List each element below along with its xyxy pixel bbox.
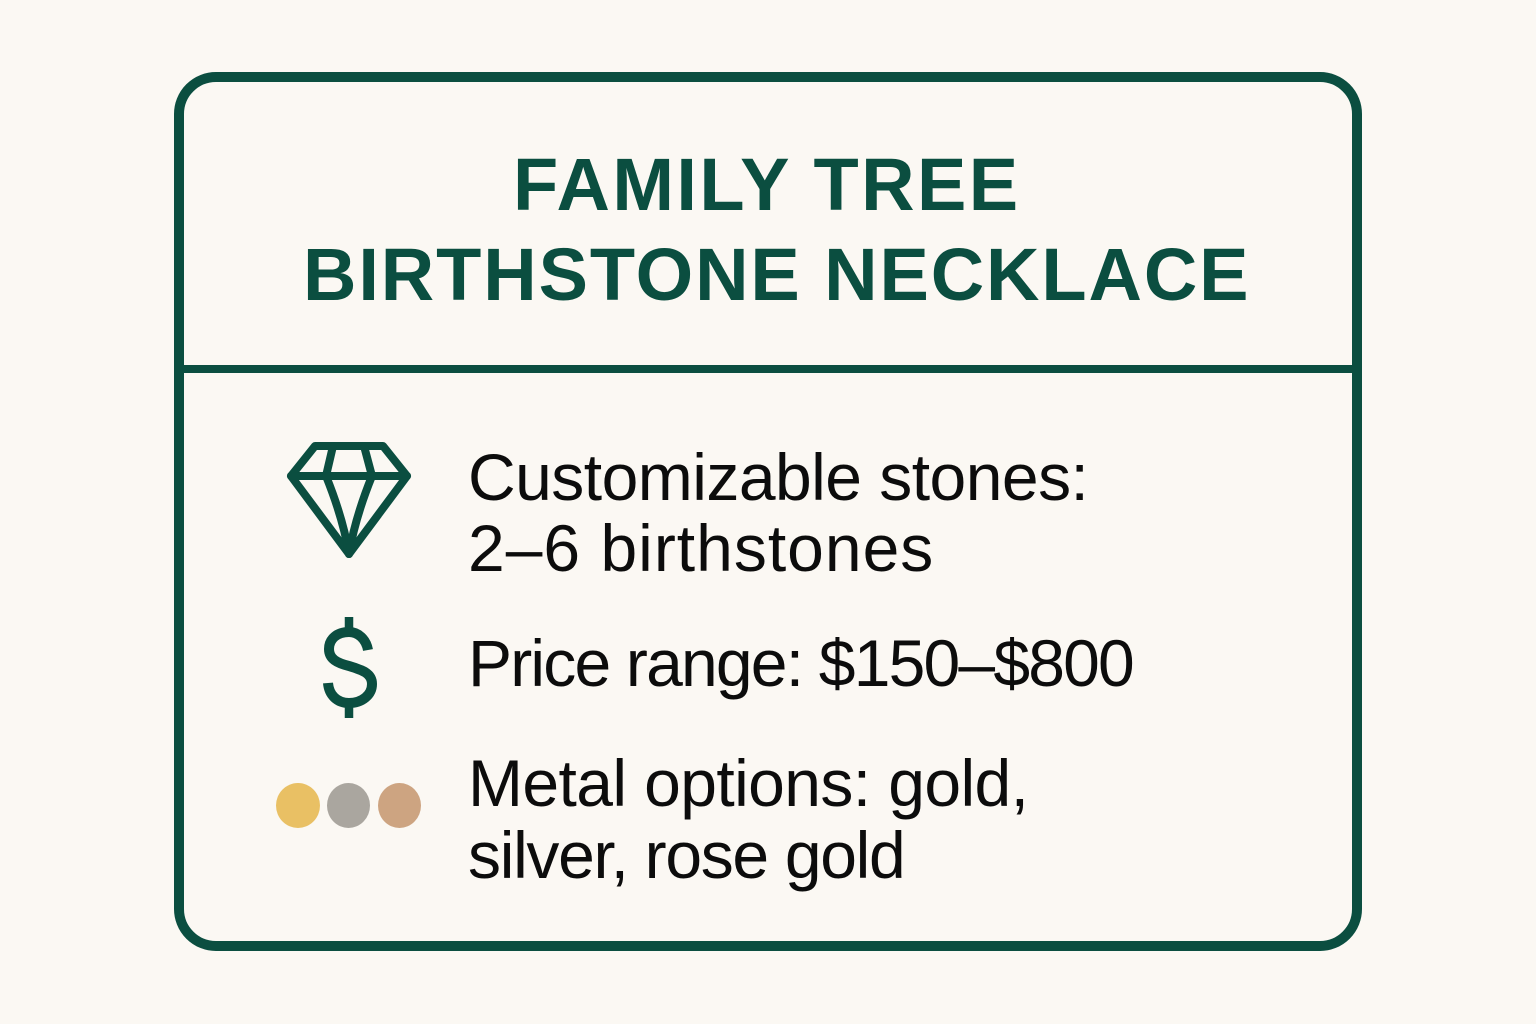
text: customizable stones: 2–6 birthstones [468, 511, 934, 585]
title line 1: FAMILY TREE [513, 143, 1021, 226]
swatch: rose gold [378, 783, 421, 828]
title line 2: BIRTHSTONE NECKLACE [303, 233, 1250, 316]
swatch: silver [327, 783, 370, 828]
text: metal options: Metal options: gold, [468, 746, 1028, 820]
text: customizable stones [468, 440, 1088, 585]
text: metal options [468, 746, 1028, 892]
header divider [180, 365, 1356, 373]
icon: diamond [286, 442, 412, 558]
text: price range: Price range: $150–$800 [468, 626, 1133, 700]
swatch: gold [276, 783, 320, 828]
icon: metal swatches [276, 783, 421, 828]
card frame [174, 72, 1362, 951]
text: customizable stones: Customizable stones: [468, 440, 1088, 514]
text: metal options: silver, rose gold [468, 818, 904, 892]
icon: dollar sign [323, 617, 377, 718]
